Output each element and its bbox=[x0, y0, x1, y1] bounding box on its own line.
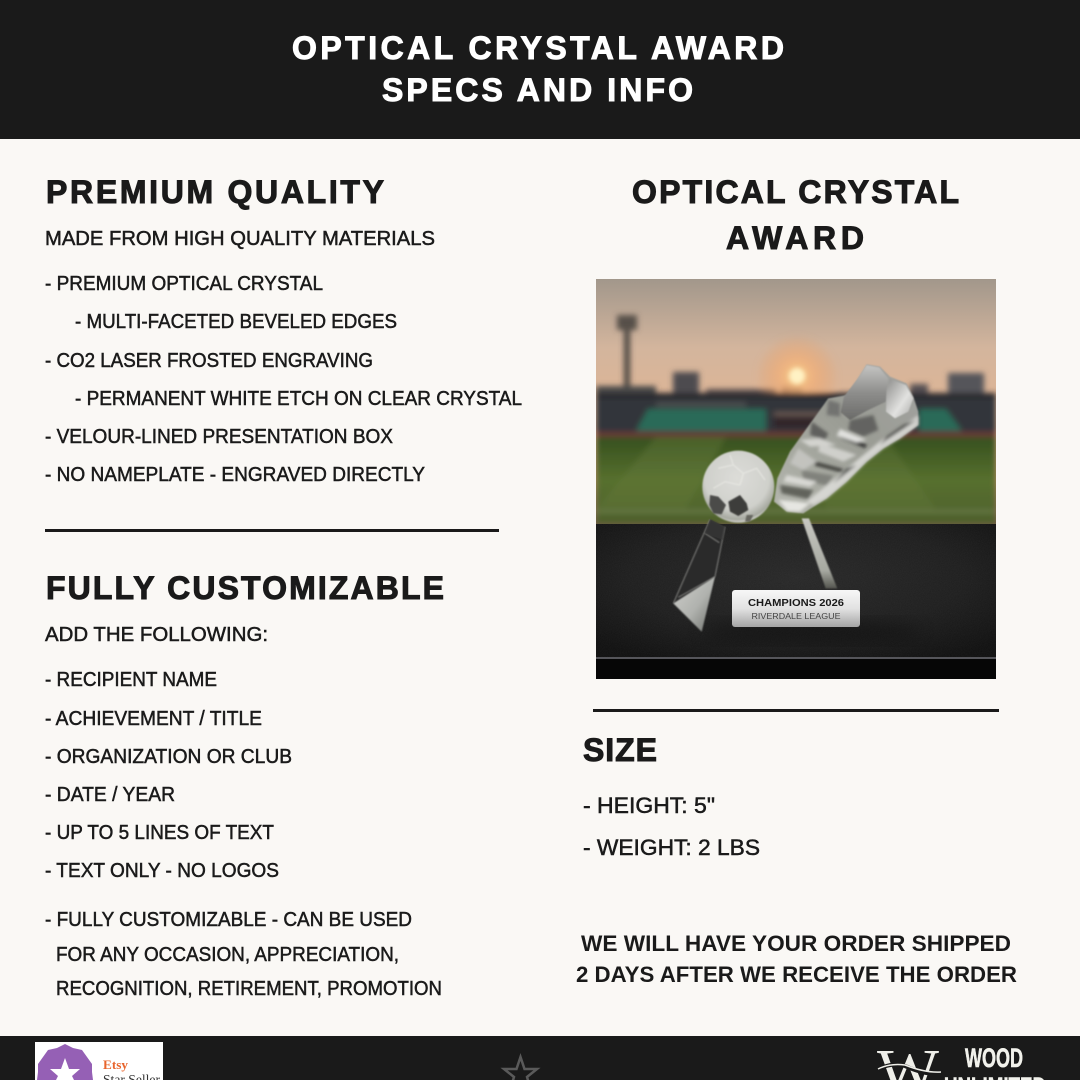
list: customization options: - DATE / YEAR bbox=[45, 784, 175, 806]
sun core bbox=[789, 368, 805, 384]
list: customization options: - ACHIEVEMENT / TITLE bbox=[45, 708, 262, 730]
engraved plate: RIVERDALE LEAGUE bbox=[752, 611, 841, 621]
heading: size: SIZE bbox=[583, 732, 657, 768]
engraved plate bbox=[732, 590, 860, 627]
trophy: crystal boot and ball bbox=[673, 364, 918, 632]
list: dimensions: - HEIGHT: 5" bbox=[583, 793, 715, 818]
left post bbox=[673, 519, 725, 632]
heading: premium quality: PREMIUM QUALITY bbox=[46, 174, 384, 210]
callout: shipping: 2 DAYS AFTER WE RECEIVE THE ORDER bbox=[576, 962, 1017, 987]
footer band bbox=[0, 1036, 1080, 1080]
boot stem bbox=[802, 518, 837, 588]
list: materials: - PERMANENT WHITE ETCH ON CLEAR CRYSTAL bbox=[75, 388, 522, 410]
list: customization options: - ORGANIZATION OR CLUB bbox=[45, 746, 292, 768]
logo: wood unlimited: WOOD bbox=[965, 1043, 1023, 1073]
panel: premium quality bbox=[45, 174, 522, 486]
title bbox=[292, 30, 784, 108]
text: occasions note bbox=[45, 909, 442, 1000]
heading: fully customizable: FULLY CUSTOMIZABLE bbox=[46, 570, 444, 606]
text: occasions note: FOR ANY OCCASION, APPRECIATION, bbox=[56, 944, 399, 966]
heading: product name bbox=[632, 174, 959, 256]
badge: etsy star seller bbox=[35, 1042, 163, 1080]
panel: fully customizable bbox=[45, 570, 444, 1000]
text: materials intro: MADE FROM HIGH QUALITY MATERIALS bbox=[45, 228, 435, 250]
list: dimensions: - WEIGHT: 2 LBS bbox=[583, 835, 760, 860]
callout: shipping bbox=[576, 931, 1017, 987]
text: occasions note: RECOGNITION, RETIREMENT, PROMOTION bbox=[56, 978, 442, 1000]
product photo: crystal soccer award in stadium bbox=[596, 279, 996, 679]
list: dimensions bbox=[583, 793, 760, 860]
list: customization options: - TEXT ONLY - NO LOGOS bbox=[45, 860, 279, 882]
crystal ball bbox=[702, 451, 774, 523]
title: SPECS AND INFO bbox=[382, 72, 693, 108]
text: customization intro: ADD THE FOLLOWING: bbox=[45, 624, 268, 646]
badge: etsy star seller: Etsy bbox=[103, 1057, 129, 1072]
crystal boot bbox=[774, 364, 918, 513]
logo: wood unlimited bbox=[877, 1038, 1046, 1080]
list: customization options bbox=[45, 669, 292, 882]
heading: product name: OPTICAL CRYSTAL bbox=[632, 174, 959, 210]
list: customization options: - UP TO 5 LINES OF TEXT bbox=[45, 822, 274, 844]
list: materials: - CO2 LASER FROSTED ENGRAVING bbox=[45, 350, 373, 372]
list: materials: - NO NAMEPLATE - ENGRAVED DIRECTLY bbox=[45, 464, 425, 486]
icon: star bbox=[504, 1057, 537, 1080]
heading: product name: AWARD bbox=[726, 220, 864, 256]
list: materials: - VELOUR-LINED PRESENTATION BOX bbox=[45, 426, 393, 448]
text: occasions note: - FULLY CUSTOMIZABLE - CAN BE USED bbox=[45, 909, 412, 931]
header band bbox=[0, 0, 1080, 139]
list: materials bbox=[45, 273, 522, 486]
list: materials: - PREMIUM OPTICAL CRYSTAL bbox=[45, 273, 323, 295]
list: materials: - MULTI-FACETED BEVELED EDGES bbox=[75, 311, 397, 333]
title: OPTICAL CRYSTAL AWARD bbox=[292, 30, 784, 66]
callout: shipping: WE WILL HAVE YOUR ORDER SHIPPED bbox=[581, 931, 1011, 956]
engraved plate: CHAMPIONS 2026 bbox=[748, 597, 844, 609]
panel: size bbox=[583, 732, 760, 860]
list: customization options: - RECIPIENT NAME bbox=[45, 669, 217, 691]
asphalt floor bbox=[596, 524, 996, 679]
stadium backdrop bbox=[596, 315, 996, 524]
